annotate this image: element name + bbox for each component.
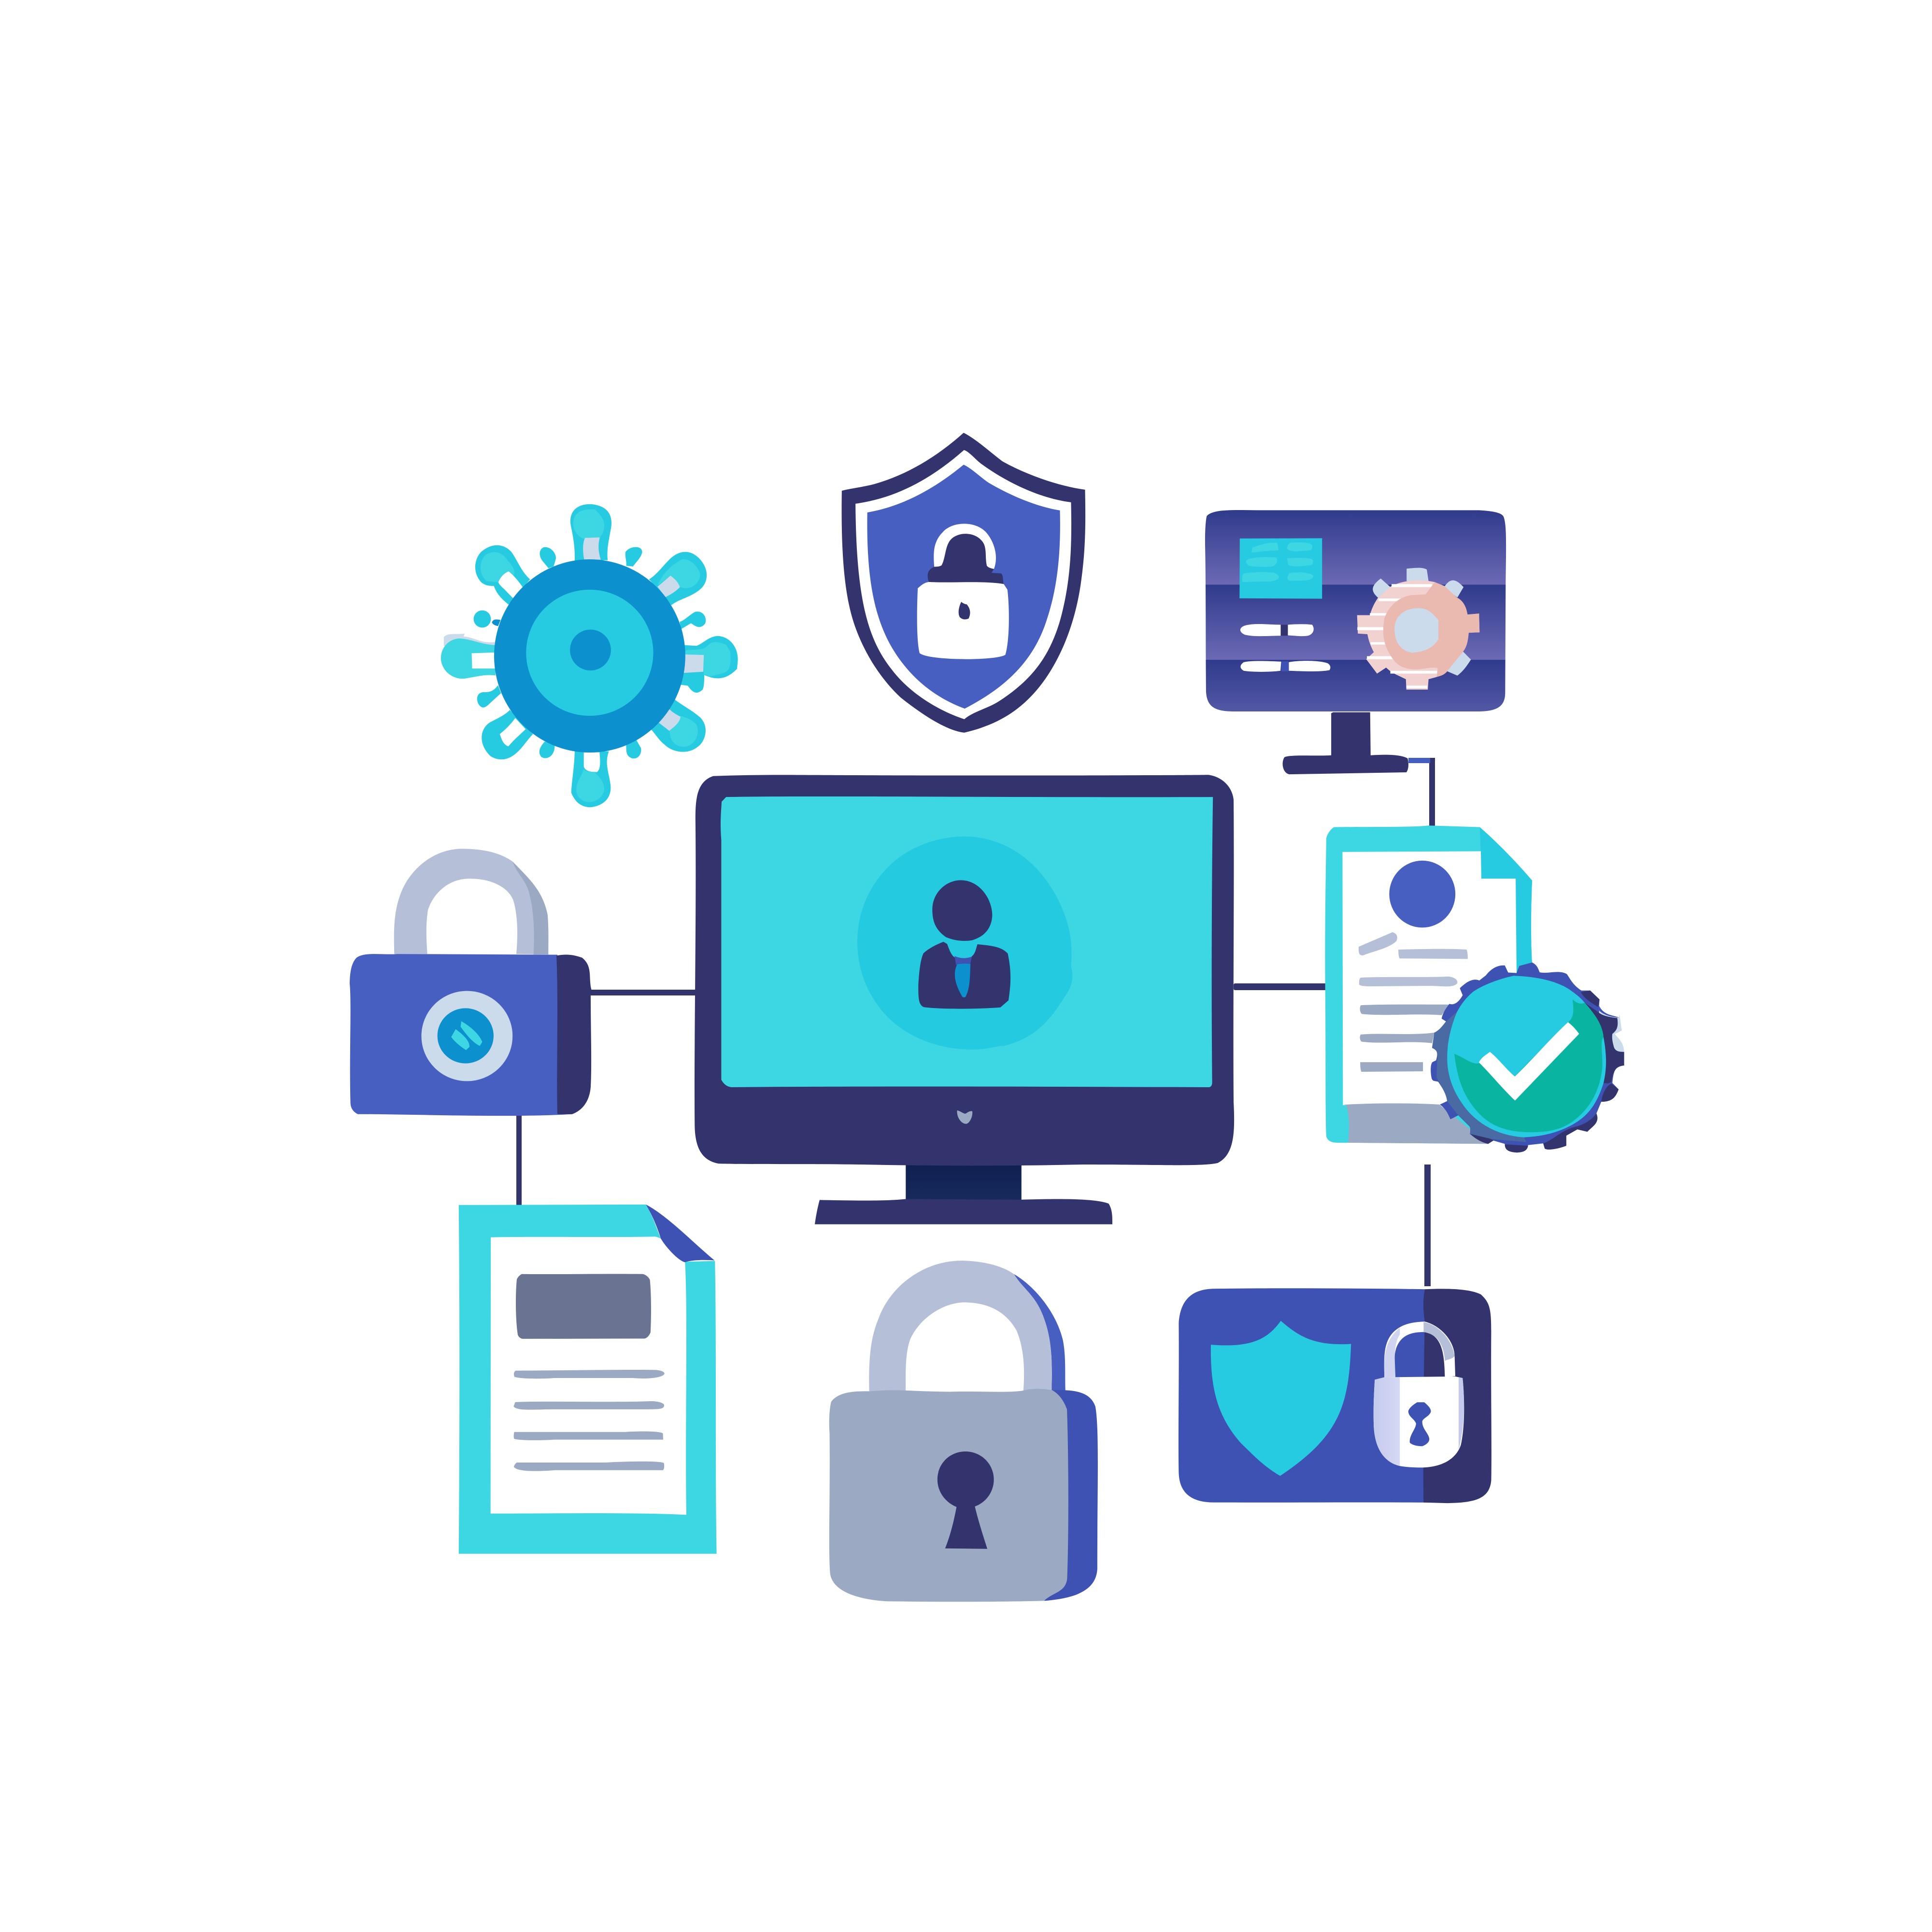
- padlock: [1374, 1321, 1464, 1467]
- icon: document with image and text lines: [459, 1205, 717, 1554]
- connector lines: [516, 758, 1435, 1286]
- monitor screen: [721, 796, 1213, 1087]
- lock body: [1044, 1390, 1098, 1601]
- text lines: [1359, 932, 1468, 1072]
- monitor panel bands: [1203, 509, 1508, 713]
- settings rows: [1240, 624, 1330, 672]
- icon: profile document with verified badge: [1325, 825, 1624, 1152]
- verified badge: [1431, 963, 1624, 1152]
- shackle: [394, 849, 548, 954]
- icon: virus: [441, 504, 738, 807]
- icon: large padlock: [829, 1261, 1098, 1602]
- monitor stand: [1283, 712, 1408, 774]
- shackle: [1014, 1274, 1065, 1391]
- shield: [1211, 1321, 1351, 1476]
- user figure: [918, 880, 1010, 1009]
- lock body: [350, 954, 572, 1116]
- icon: security card with shield and lock: [1179, 1288, 1492, 1503]
- folded corner: [646, 1205, 714, 1262]
- gear: [1357, 568, 1479, 690]
- document sheet: [1325, 825, 1532, 1144]
- text lines: [513, 1370, 665, 1471]
- icon: security shield with padlock: [842, 433, 1085, 733]
- icon: settings monitor with gear: [1203, 509, 1508, 774]
- document frame: [459, 1205, 717, 1554]
- monitor base: [815, 1199, 1112, 1224]
- monitor body: [695, 775, 1234, 1165]
- image placeholder: [516, 1274, 651, 1339]
- data card: [1239, 538, 1322, 599]
- illustration: connected cyber security network: [350, 433, 1624, 1602]
- monitor stand: [906, 1163, 1022, 1201]
- keyhole: [938, 1451, 994, 1549]
- card: [1179, 1288, 1425, 1503]
- icon: main monitor with user profile: [695, 775, 1234, 1224]
- lock dial: [421, 991, 512, 1081]
- user avatar disc: [857, 837, 1072, 1050]
- power button: [957, 1110, 972, 1124]
- icon: padlock on blue body: [350, 849, 591, 1116]
- document page: [491, 1236, 686, 1515]
- profile avatar: [1389, 861, 1455, 927]
